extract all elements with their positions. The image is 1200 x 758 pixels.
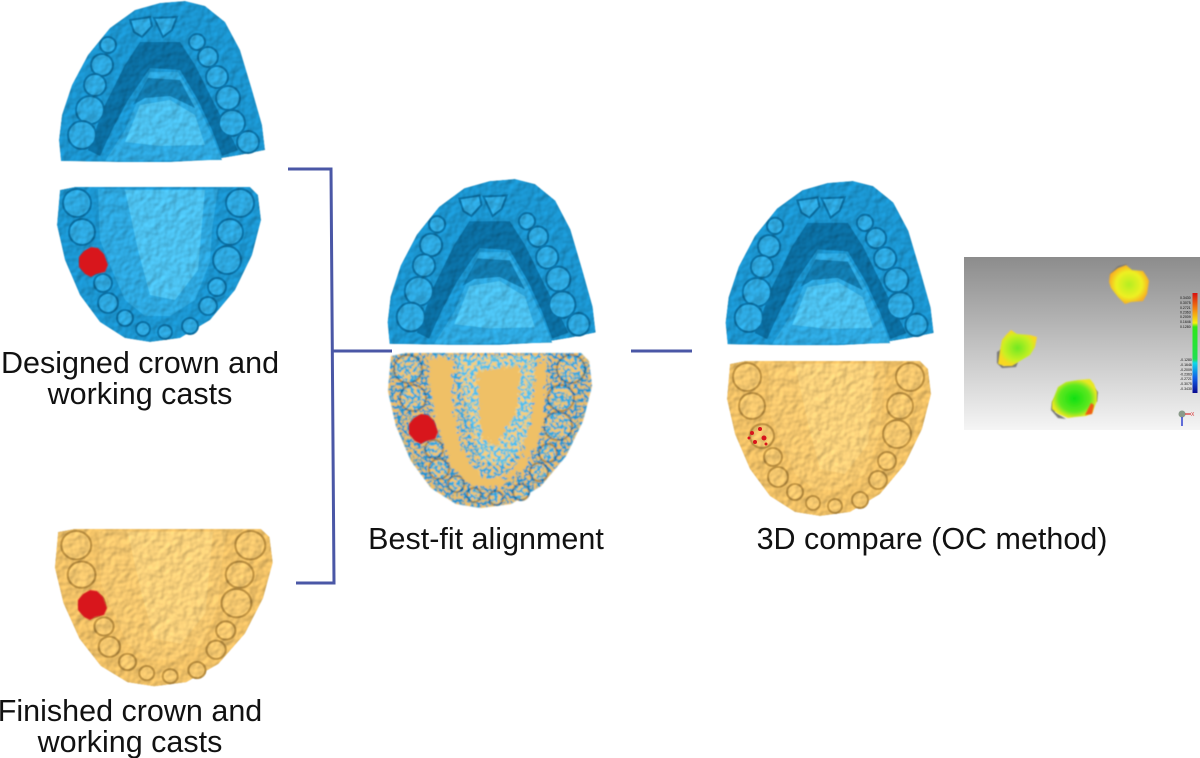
colour scale labels: -0.3075 [1180,382,1192,386]
icon: crown (red) [409,414,438,444]
lower cast (gold) [727,361,931,516]
colour scale bar [1192,293,1198,393]
label: working casts: working casts [37,725,222,758]
deviation patch: bottom centre [1052,379,1097,418]
colour scale labels: -0.2363 [1180,372,1192,376]
panel: finished crown and working casts [0,529,273,758]
colour scale labels: -0.3430 [1180,387,1192,391]
colour scale labels: 0.3430 [1180,296,1191,300]
panel: 3D compare [726,181,1107,556]
icon: axis triad: X [1191,412,1195,418]
hot spot [1085,403,1094,415]
upper cast (blue) [388,179,596,345]
colour scale labels: -0.1646 [1180,363,1192,367]
label: designed crown: Designed crown and [1,346,279,380]
icon: designed crown (red) [79,247,108,277]
upper working cast (blue) [59,1,265,162]
colour scale labels [1180,296,1192,391]
panel: best-fit alignment [368,179,604,556]
panel: colour deviation map [964,257,1200,430]
bracket connector [288,169,392,583]
colour scale labels: -0.2721 [1180,377,1192,381]
colour scale labels: 0.1646 [1180,320,1191,324]
overlaid lower casts with speckle [388,353,592,508]
colour scale labels: -0.1280 [1180,358,1192,362]
deviation patch: top right [1109,265,1149,304]
colour scale labels: 0.3075 [1180,301,1191,305]
colour scale labels: -0.2009 [1180,368,1192,372]
colour scale labels: 0.2721 [1180,306,1191,310]
label: working casts: working casts [47,377,232,411]
panel: designed crown and working casts [1,1,279,411]
upper cast (blue) [726,181,934,345]
colour scale labels: 0.2009 [1180,315,1191,319]
icon: finished crown (red) [78,590,107,620]
deviation patch: left [998,330,1037,366]
label: 3D compare: 3D compare (OC method) [757,522,1107,556]
label: finished crown: Finished crown and [0,694,262,728]
lower working cast with designed crown (blue) [57,187,261,342]
grey patch margins [997,264,1127,419]
map background [964,257,1200,430]
icon: red deviation spots [748,427,768,446]
lower cast with finished crown (gold) [55,529,273,686]
label: best-fit alignment: Best-fit alignment [368,522,604,556]
colour scale labels: 0.1280 [1180,325,1191,329]
connector dash [631,350,692,352]
icon: axis triad [1178,410,1195,426]
colour scale labels: 0.2363 [1180,310,1191,314]
